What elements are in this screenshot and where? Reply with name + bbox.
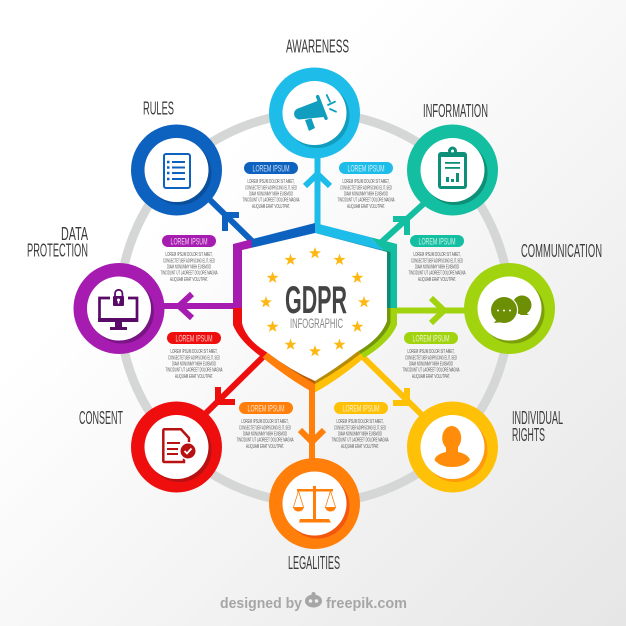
arrow: legalities [300, 390, 324, 460]
text block: rules: CONSECTETUER ADIPISCING ELIT, SED [245, 185, 297, 191]
label: data protection: PROTECTION [27, 240, 88, 260]
text block: information [408, 235, 466, 283]
shield white face [242, 233, 387, 381]
text block: consent: LOREM IPSUM DOLOR SIT AMET, [170, 349, 218, 355]
node: individual rights [407, 402, 498, 492]
text block: consent: TINCIDUNT UT LAOREET DOLORE MAGNA [166, 368, 223, 374]
text block: information: ALIQUAM ERAT VOLUTPAT. [418, 277, 456, 283]
icon: clipboard [438, 146, 467, 189]
watermark [220, 592, 407, 612]
text block: communication [402, 332, 460, 380]
label: individual rights [512, 408, 563, 445]
EU stars [260, 247, 370, 356]
text block: data protection: LOREM IPSUM DOLOR SIT AMET, [166, 252, 213, 258]
node: legalities [269, 458, 360, 549]
text block: awareness [338, 162, 395, 210]
text block: awareness: LOREM IPSUM DOLOR SIT AMET, [342, 179, 390, 185]
icon: scales [293, 486, 336, 522]
icon: monitor with lock [98, 290, 138, 330]
text block: data protection: TINCIDUNT UT LAOREET DOLORE MAGNA [160, 271, 218, 277]
arrow: communication [392, 298, 467, 323]
arrow: rules [207, 197, 254, 243]
text block: legalities: TINCIDUNT UT LAOREET DOLORE MAGNA [236, 438, 294, 444]
icon: freepik logo [305, 592, 322, 608]
title: GDPR: GDPR [285, 279, 347, 322]
text block: data protection: DIAM NONUMMY NIBH EUISMOD [167, 264, 211, 270]
text block: legalities: DIAM NONUMMY NIBH EUISMOD [243, 432, 287, 438]
label: individual rights: INDIVIDUAL [512, 408, 563, 428]
arrow: consent [203, 354, 266, 416]
shield coloured border [233, 223, 397, 392]
icon: megaphone [294, 95, 336, 131]
text block: information: LOREM IPSUM DOLOR SIT AMET, [414, 252, 461, 258]
text block: rules: LOREM IPSUM DOLOR SIT AMET, [248, 179, 295, 185]
node: awareness [269, 68, 360, 158]
grey ring [120, 113, 510, 503]
label: information: INFORMATION [423, 101, 488, 121]
arrow: awareness [305, 155, 330, 225]
text block: data protection: CONSECTETUER ADIPISCING ELIT, SED [163, 258, 215, 264]
text block: awareness: TINCIDUNT UT LAOREET DOLORE MAGNA [338, 198, 395, 204]
text block: rules [242, 162, 300, 210]
text block: awareness: CONSECTETUER ADIPISCING ELIT, SED [340, 185, 392, 191]
node: data protection [74, 263, 164, 354]
node: communication [464, 263, 555, 354]
text block: information: LOREM IPSUM [418, 236, 456, 248]
label: data protection [27, 224, 88, 260]
text block: awareness: DIAM NONUMMY NIBH EUISMOD [344, 192, 388, 198]
text block: communication: LOREM IPSUM [412, 334, 450, 344]
node: consent [131, 402, 222, 492]
shield [233, 223, 397, 392]
arrows [162, 155, 467, 460]
arrow: individual rights [360, 354, 423, 416]
text block: communication: LOREM IPSUM DOLOR SIT AMET, [408, 349, 455, 355]
text block: communication: ALIQUAM ERAT VOLUTPAT. [412, 374, 450, 380]
text block: data protection: LOREM IPSUM [170, 236, 208, 248]
text block: consent: CONSECTETUER ADIPISCING ELIT, SED [168, 355, 220, 361]
text: CONSENT [79, 408, 123, 428]
text block: communication: DIAM NONUMMY NIBH EUISMOD [409, 362, 453, 368]
node: information [407, 124, 498, 216]
text block: rules: DIAM NONUMMY NIBH EUISMOD [249, 192, 293, 198]
icon: checklist [164, 154, 190, 188]
subtitle: infographic: INFOGRAPHIC [290, 315, 343, 331]
text block: communication: TINCIDUNT UT LAOREET DOLORE MAGNA [402, 368, 460, 374]
label: rules: RULES [143, 98, 174, 118]
text block: consent [166, 332, 223, 380]
text block: legalities: CONSECTETUER ADIPISCING ELIT, SED [239, 425, 291, 431]
watermark: designed by [220, 595, 303, 612]
text block: information: TINCIDUNT UT LAOREET DOLORE MAGNA [408, 271, 466, 277]
text block: consent: DIAM NONUMMY NIBH EUISMOD [172, 362, 216, 368]
node: rules [131, 124, 222, 216]
text block: communication: CONSECTETUER ADIPISCING ELIT, SED [405, 355, 457, 361]
label: awareness: AWARENESS [286, 36, 349, 56]
text block: data protection [160, 235, 218, 283]
text block: individual rights: CONSECTETUER ADIPISCING ELIT, SED [334, 425, 386, 431]
text block: legalities: ALIQUAM ERAT VOLUTPAT. [246, 444, 284, 450]
text block: legalities [236, 402, 294, 450]
arrow: information [376, 198, 430, 247]
text block: awareness: LOREM IPSUM [348, 164, 385, 174]
text block: consent: LOREM IPSUM [176, 334, 213, 344]
text block: individual rights: LOREM IPSUM DOLOR SIT AMET, [336, 419, 384, 425]
text block: rules: ALIQUAM ERAT VOLUTPAT. [252, 204, 290, 210]
text block: individual rights: LOREM IPSUM [342, 404, 380, 414]
watermark: freepik.com [326, 595, 407, 612]
text block: legalities: LOREM IPSUM [248, 404, 285, 414]
text block: individual rights: DIAM NONUMMY NIBH EUISMOD [338, 432, 382, 438]
text block: information: DIAM NONUMMY NIBH EUISMOD [415, 264, 459, 270]
label: individual rights: RIGHTS [512, 425, 545, 445]
text block: rules: TINCIDUNT UT LAOREET DOLORE MAGNA [242, 198, 300, 204]
text block: individual rights: ALIQUAM ERAT VOLUTPAT. [341, 444, 379, 450]
text block: individual rights: TINCIDUNT UT LAOREET DOLORE MAGNA [332, 438, 389, 444]
text block: rules: LOREM IPSUM [252, 164, 290, 174]
icon: document with check [163, 429, 197, 462]
label: legalities: LEGALITIES [288, 553, 340, 573]
text block: data protection: ALIQUAM ERAT VOLUTPAT. [170, 277, 208, 283]
shield inner shadow [242, 233, 390, 384]
icon: person [434, 426, 470, 467]
label: data protection: DATA [61, 224, 88, 244]
text block: consent: ALIQUAM ERAT VOLUTPAT. [175, 374, 213, 380]
text block: individual rights [332, 402, 389, 450]
text block: legalities: LOREM IPSUM DOLOR SIT AMET, [242, 419, 289, 425]
icon: speech bubbles [490, 296, 532, 324]
text block: information: CONSECTETUER ADIPISCING ELIT, SED [411, 258, 463, 264]
arrow: data protection [162, 294, 236, 318]
text block: awareness: ALIQUAM ERAT VOLUTPAT. [347, 204, 385, 210]
